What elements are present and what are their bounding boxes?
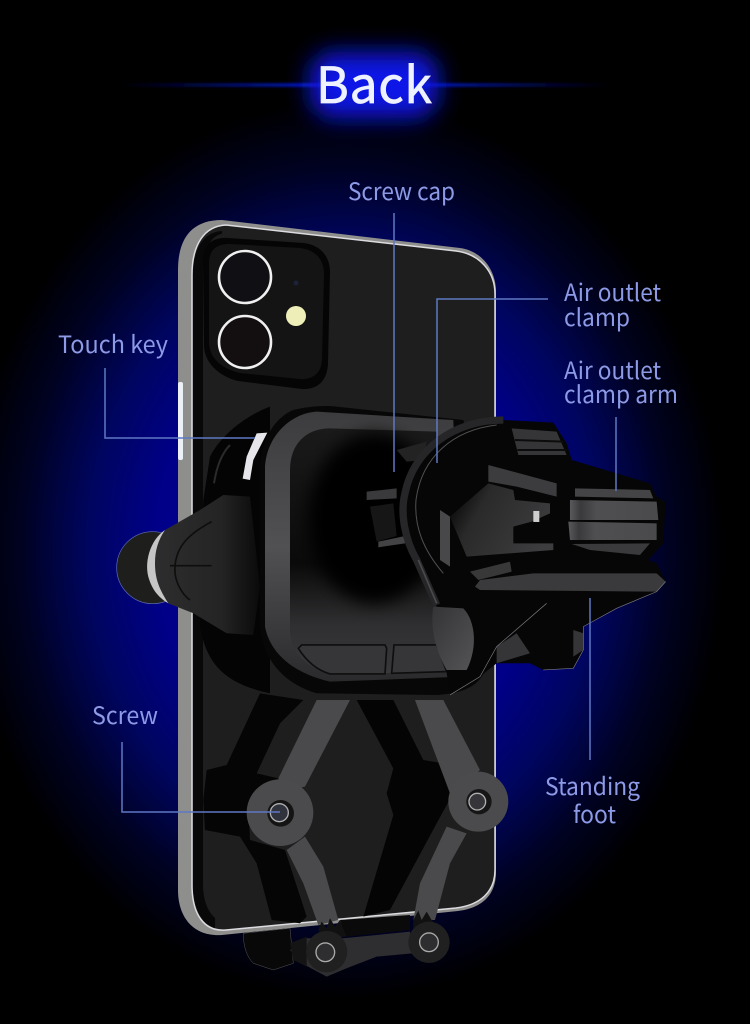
jaw slit: [440, 510, 450, 567]
clamp arm blocks: [568, 488, 658, 555]
callout: Air outlet clamp: clamp: [564, 298, 630, 333]
bottom left screw: [306, 931, 347, 972]
foot outline: [450, 582, 666, 695]
callout: Air outlet clamp arm: [564, 351, 678, 491]
silver band: [147, 530, 168, 603]
clamp silhouette: [403, 420, 666, 695]
phone frame: [178, 220, 496, 935]
right arm shadow: [357, 700, 457, 917]
ring slot: [418, 560, 437, 603]
housing highlight: [214, 445, 230, 483]
lower lens: [219, 316, 271, 368]
socket: [308, 433, 442, 603]
frame white edge: [192, 225, 495, 930]
right upper arm: [415, 700, 480, 793]
plate frame: [265, 412, 463, 682]
foot plate top: [470, 562, 512, 580]
camera module: [203, 238, 330, 389]
teeth: [318, 911, 435, 938]
left button: [298, 645, 387, 674]
left lower arm: [287, 837, 338, 925]
bottom right screw: [408, 922, 450, 963]
right screw disc: [448, 772, 508, 832]
left upper arm: [278, 700, 350, 790]
phone body: [178, 220, 496, 935]
left screw disc: [247, 779, 313, 846]
mount plate: [260, 406, 490, 695]
plate interior: [290, 428, 467, 674]
dark back panel top: [203, 233, 491, 922]
callout: Screw: [92, 696, 280, 812]
title: Back with glowing rule: [120, 46, 610, 118]
callout: Screw cap: Screw cap: [348, 172, 455, 207]
callout: Standing foot: foot: [573, 795, 616, 830]
callout: Air outlet clamp arm: clamp arm: [564, 375, 678, 410]
ring lobe: [432, 607, 474, 670]
pin: [533, 511, 539, 522]
right button: [392, 645, 447, 673]
rear housing: [200, 407, 270, 693]
callout: Screw: Screw: [92, 696, 158, 731]
foot plate: [475, 573, 666, 592]
grip knurl: [512, 428, 567, 455]
touch key: [243, 433, 267, 480]
dark inner left edge: [193, 231, 222, 928]
callout: Standing foot: [545, 598, 640, 830]
bottom link: [290, 932, 413, 977]
upper jaw strip: [488, 465, 557, 497]
callout: Air outlet clamp: Air outlet: [564, 273, 661, 308]
flash: [286, 306, 306, 326]
ring rim: [403, 420, 503, 605]
cone: [150, 495, 260, 635]
lower band: [340, 915, 410, 937]
microphone dot: [294, 280, 298, 286]
cone rib: [170, 522, 212, 600]
left arm shadow: [203, 693, 307, 923]
stem pieces: [367, 488, 397, 500]
callout: Air outlet clamp arm: Air outlet: [564, 351, 661, 386]
side button: [178, 382, 183, 460]
grey jaw body: [450, 483, 553, 557]
standing foot pieces: [497, 633, 530, 663]
bottom foot: [243, 928, 293, 970]
callout: Standing foot: Standing: [545, 767, 640, 802]
callout: Air outlet clamp: [437, 273, 661, 463]
air outlet clamp: [403, 420, 666, 695]
callout: Touch key: [58, 325, 255, 438]
upper lens: [219, 251, 271, 303]
left knob and rear housing: [117, 407, 270, 693]
title: Back with glowing rule: Back: [316, 46, 432, 118]
right lower arm: [413, 827, 467, 920]
plate outer: [260, 406, 490, 695]
rubber knob: [117, 532, 189, 604]
gravity linkage arms: [203, 693, 508, 977]
callout: Touch key: Touch key: [58, 325, 168, 360]
